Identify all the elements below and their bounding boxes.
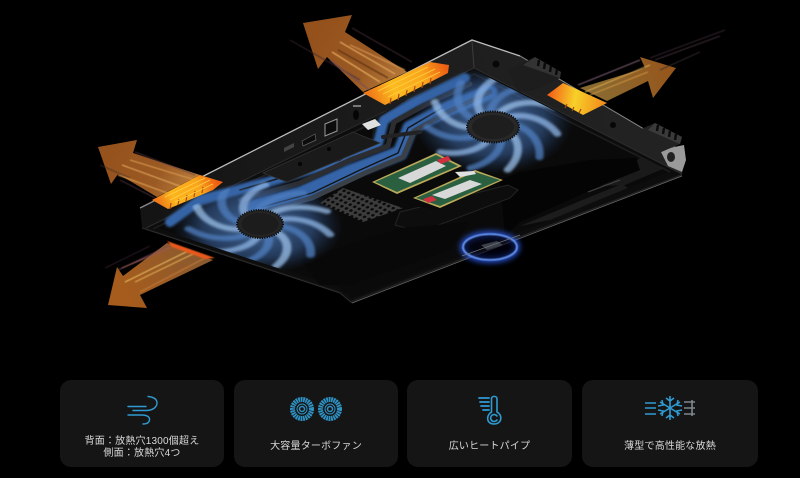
- laptop chassis: [140, 40, 686, 303]
- heat pipes: [170, 78, 490, 222]
- text: thin cooling label: 薄型で高性能な放熱: [624, 441, 716, 452]
- cover plate: [263, 119, 381, 182]
- corner bracket: [660, 145, 686, 172]
- RAM modules: [372, 153, 503, 210]
- vent: right: [547, 83, 607, 115]
- card: thin cooling: [582, 380, 758, 467]
- fan: right: [413, 66, 573, 174]
- glow ring: [462, 234, 520, 260]
- fan: left: [176, 180, 339, 270]
- icon: thermometer: [478, 396, 502, 425]
- vent: back left: [152, 175, 223, 209]
- card: turbo fan: [234, 380, 398, 467]
- vent: back middle: [363, 62, 449, 105]
- outer wall: [140, 40, 683, 303]
- icon: snowflake: [645, 396, 695, 420]
- ports: [284, 105, 361, 152]
- icon: twin fans: [290, 397, 342, 421]
- text: vent description: 背面：放熱穴1300個超え: [85, 436, 199, 447]
- arrow: right exhaust: [578, 30, 725, 101]
- rear connectors: [508, 57, 682, 156]
- bottom hairline: [352, 176, 682, 303]
- floor: [146, 68, 682, 301]
- text: vent description: 側面：放熱穴4つ: [103, 448, 181, 459]
- screw holes: [492, 60, 500, 68]
- mesh vent: [320, 188, 403, 222]
- vent: bottom left: [167, 241, 215, 259]
- arrow: left exhaust: [98, 140, 200, 198]
- silver edge: [170, 40, 520, 193]
- text: fan label: 大容量ターボファン: [270, 441, 362, 452]
- arrow: top exhaust: [290, 15, 412, 92]
- lower body blocks: [600, 158, 665, 186]
- card: heat pipe: [407, 380, 572, 467]
- text: heat pipe label: 広いヒートパイプ: [449, 441, 530, 452]
- text: vent description: [85, 435, 199, 459]
- laptop cooling illustration: [98, 15, 726, 308]
- arrow: bottom left exhaust: [105, 243, 213, 308]
- icon: wind: [127, 396, 158, 425]
- card: air vents: [60, 380, 224, 467]
